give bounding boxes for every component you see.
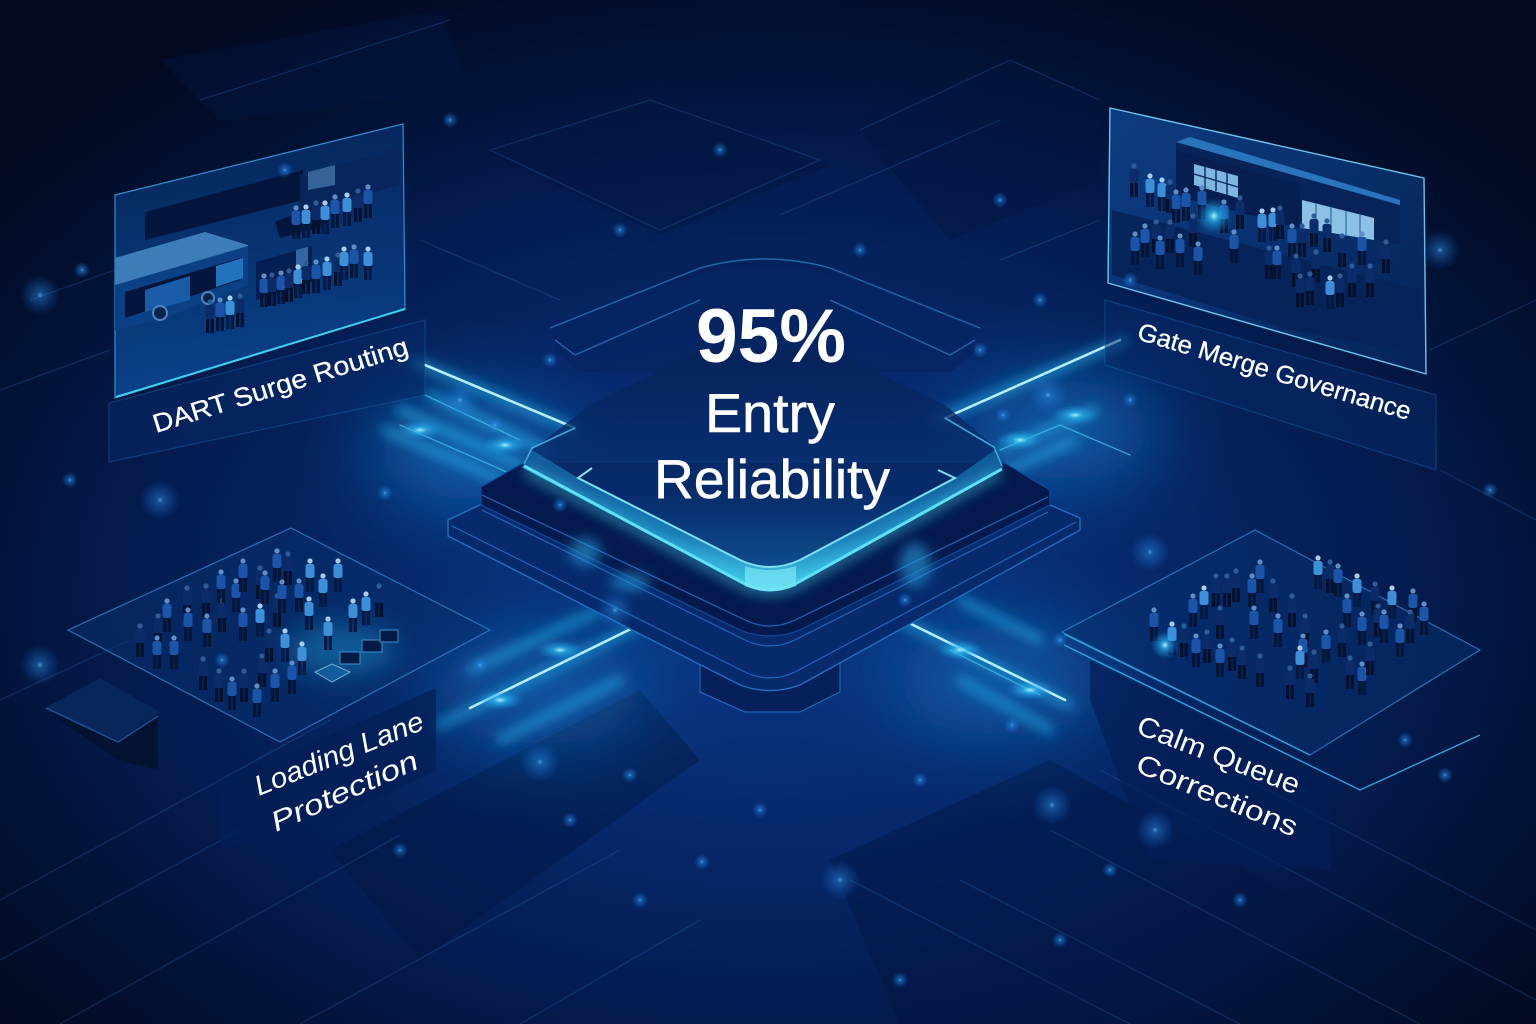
crowd xyxy=(136,548,384,717)
building xyxy=(1176,142,1400,245)
label: Loading Lane: Loading Lane xyxy=(250,705,428,802)
metric label line 1: Entry xyxy=(705,382,836,444)
crowd xyxy=(206,184,372,333)
turnstiles xyxy=(340,630,398,664)
platform: upper outline xyxy=(524,418,1002,466)
glow point xyxy=(1151,631,1179,659)
platform: inner rim xyxy=(578,468,955,567)
plinth xyxy=(1090,660,1330,870)
crowd xyxy=(1150,555,1428,707)
label: Calm Queue: Calm Queue xyxy=(1133,710,1305,800)
label: Gate Merge Governance: Gate Merge Governance xyxy=(1134,318,1414,426)
connector: bottom-left halo xyxy=(440,610,650,740)
building facade xyxy=(1176,150,1300,228)
glowing connector lines xyxy=(385,340,1130,740)
panel: Loading Lane Protection xyxy=(45,528,490,850)
panel: DART Surge Routing xyxy=(109,124,425,462)
terminal doors xyxy=(256,246,312,300)
panel: Gate Merge Governance xyxy=(1105,108,1436,470)
upper windows xyxy=(1194,164,1238,198)
platform: glass top xyxy=(522,350,1003,590)
floor grate xyxy=(315,664,350,682)
shelter xyxy=(45,678,160,770)
platform: glow under rim xyxy=(525,470,1000,591)
glass screen xyxy=(1108,108,1426,374)
metric label line 2: Reliability xyxy=(654,448,890,510)
glow point xyxy=(1196,198,1232,234)
lit doorway xyxy=(1302,200,1374,240)
platform: stacked body xyxy=(481,462,1050,636)
floor platform xyxy=(68,528,490,742)
label: DART Surge Routing: DART Surge Routing xyxy=(149,331,412,439)
connector: secondary lines xyxy=(400,395,1130,695)
connector: bottom-right halo xyxy=(900,600,1070,730)
near bus xyxy=(115,232,248,330)
lit floor glow xyxy=(285,625,395,675)
label: Corrections: Corrections xyxy=(1132,748,1302,842)
connector: top-left halo xyxy=(385,362,575,490)
plinth xyxy=(109,320,425,462)
platform: center node xyxy=(745,566,796,591)
floor platform xyxy=(1062,530,1480,755)
far bus xyxy=(145,148,400,240)
plinth xyxy=(220,688,436,850)
metric value: 95% xyxy=(696,294,846,379)
crowd xyxy=(1130,163,1390,309)
platform front edge xyxy=(1064,634,1480,790)
panel: Calm Queue Corrections xyxy=(1062,530,1480,870)
connector: top-right halo xyxy=(935,340,1125,480)
platform: reflection glows xyxy=(569,538,931,591)
platform: lower bracket xyxy=(700,660,840,712)
platform: edge lines xyxy=(452,495,1076,678)
screen glow edge xyxy=(116,309,405,397)
platform: bright rim xyxy=(524,466,1002,590)
glass screen xyxy=(115,124,405,398)
ambient glow xyxy=(370,380,1160,745)
background dark blocks xyxy=(160,10,1300,1024)
platform: lower base xyxy=(448,505,1080,690)
floor xyxy=(1112,210,1424,355)
central metric xyxy=(654,294,890,510)
central platform xyxy=(448,350,1080,712)
platform: cyan glass band xyxy=(522,450,1003,590)
connector: crisp lines xyxy=(425,340,1120,708)
stepped block behind metric xyxy=(550,259,980,372)
plinth xyxy=(1105,300,1436,470)
label: Protection: Protection xyxy=(266,745,423,837)
